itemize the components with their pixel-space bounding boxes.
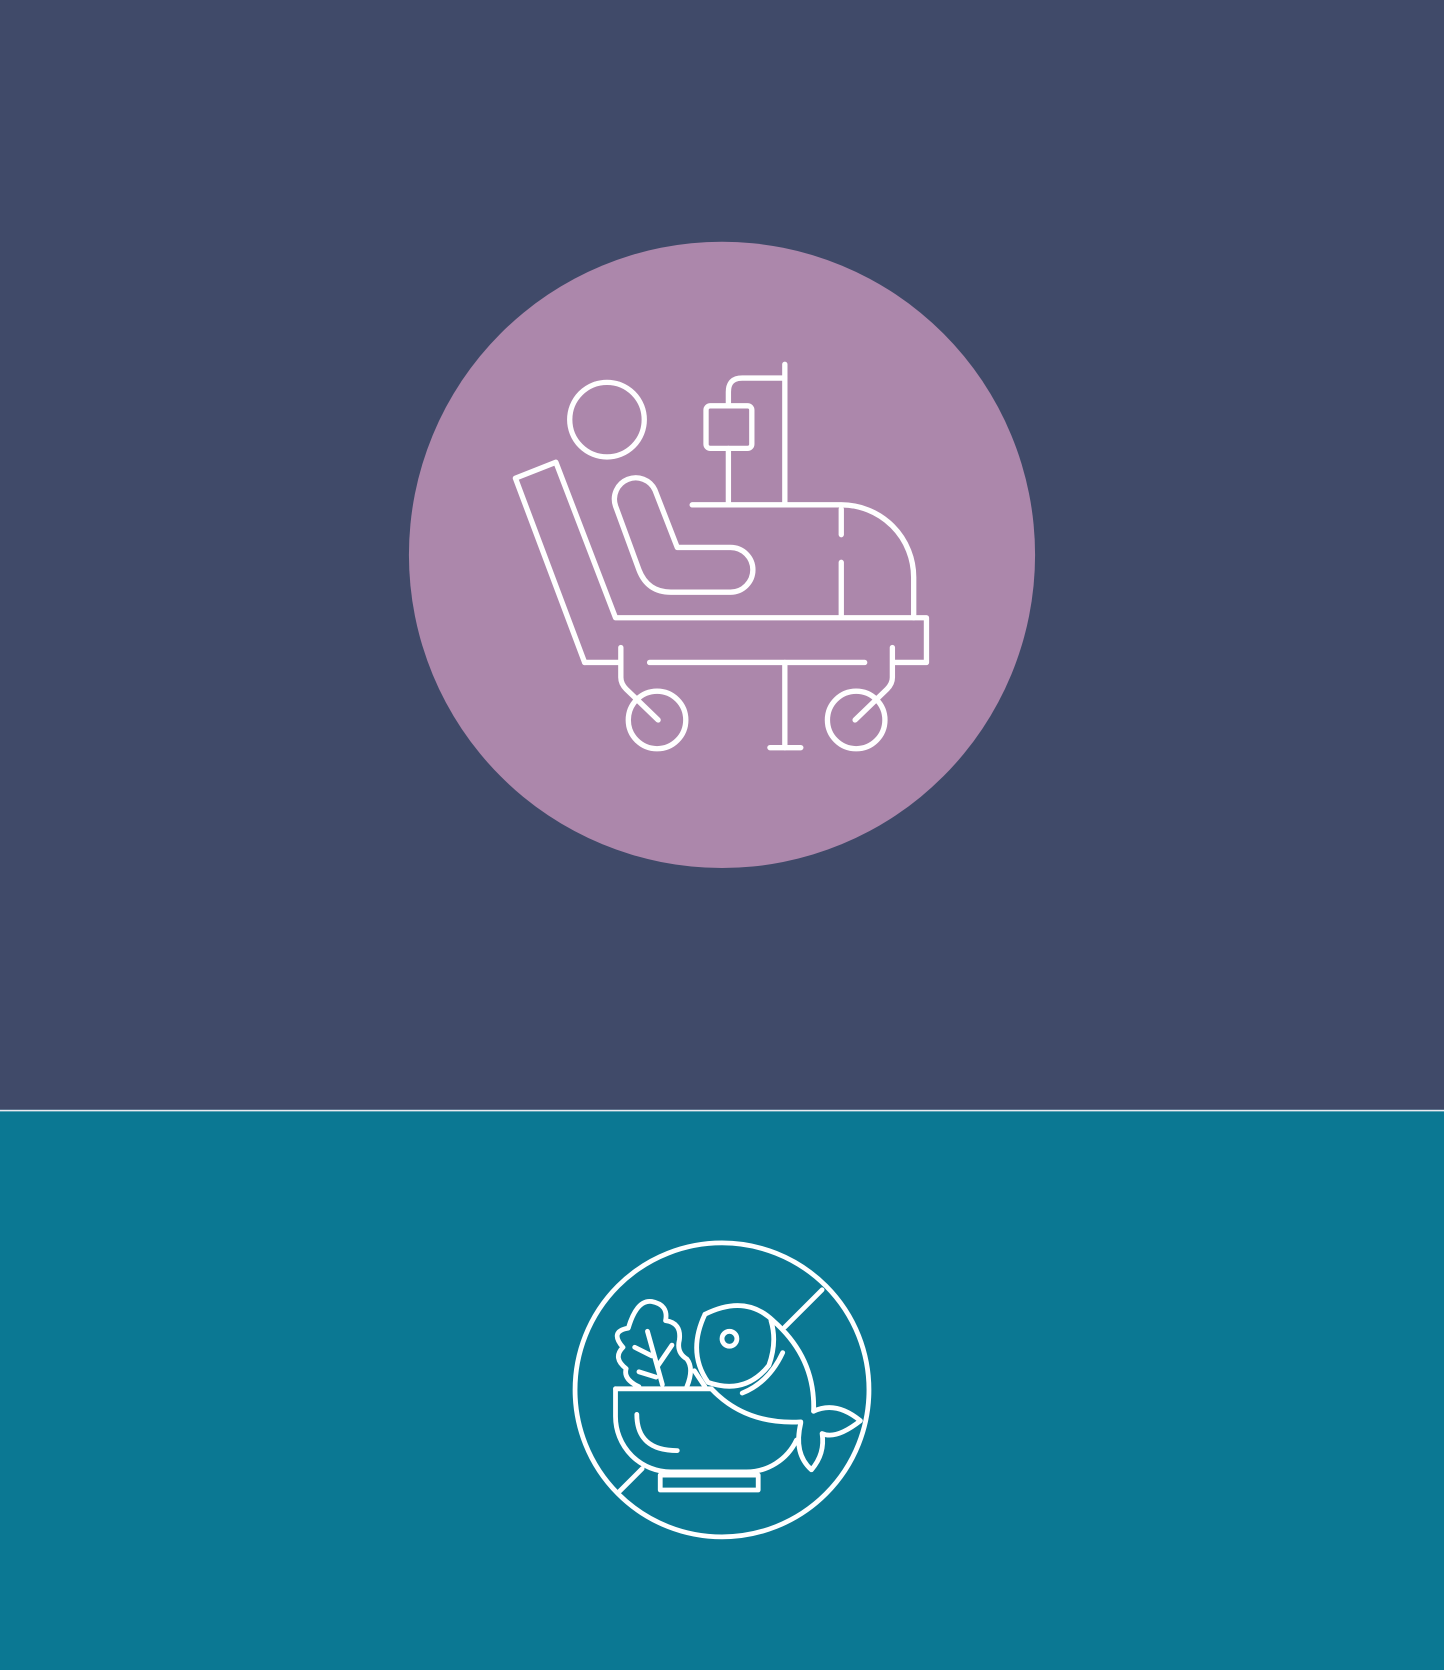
panel: bottom (teal) [575, 1243, 869, 1537]
icon: no food (bowl with fish and lettuce, crossed out) [575, 1243, 869, 1537]
icon: hospital bed patient [515, 364, 926, 749]
icon: purple circle badge with hospital bed [409, 242, 1035, 868]
panel: top (navy) [0, 0, 1444, 1111]
